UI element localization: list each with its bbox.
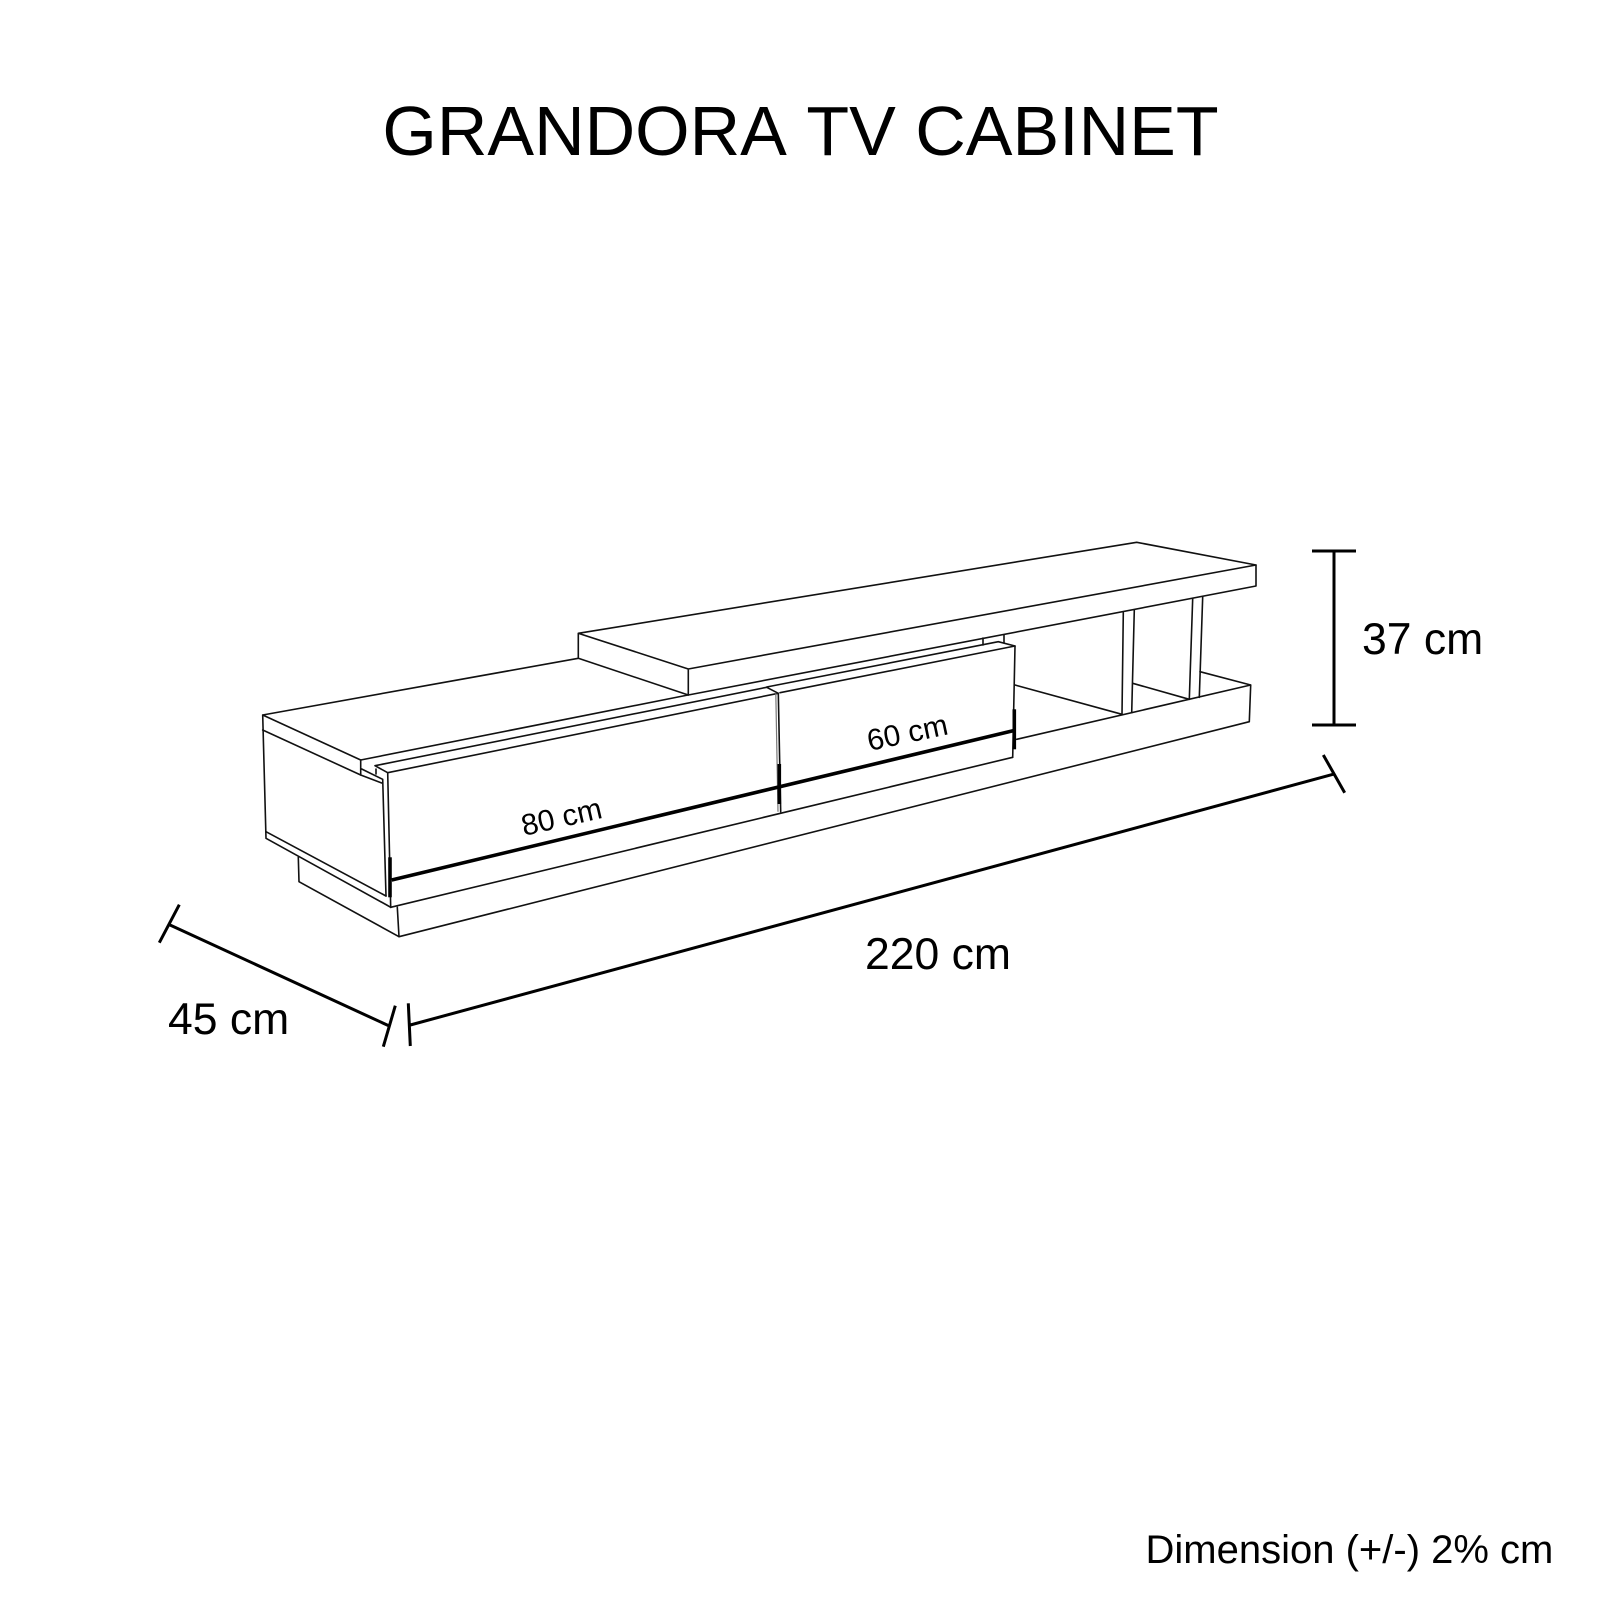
label: 45 cm: 45 cm	[168, 995, 289, 1044]
dimension: depth 45 cm	[159, 905, 395, 1047]
thick drawer measure lines	[390, 709, 1014, 897]
footnote: Dimension (+/-) 2% cm	[1146, 1528, 1553, 1572]
dimension: height 37 cm	[1312, 551, 1356, 725]
left drawer 80 cm	[375, 687, 781, 907]
label: 37 cm: 37 cm	[1362, 615, 1483, 664]
dimension: width 220 cm	[408, 755, 1345, 1046]
cabinet line drawing	[263, 542, 1256, 937]
title: GRANDORA TV CABINET	[382, 92, 1219, 170]
lower left cabinet top and side	[263, 658, 688, 907]
plinth base	[298, 685, 1251, 937]
upper top shelf	[578, 542, 1256, 695]
label: 80 cm: 80 cm	[518, 792, 605, 843]
label: 60 cm: 60 cm	[864, 709, 951, 758]
label: 220 cm: 220 cm	[865, 930, 1011, 979]
right drawer 60 cm	[767, 635, 1015, 757]
open shelf compartments	[1015, 597, 1251, 714]
